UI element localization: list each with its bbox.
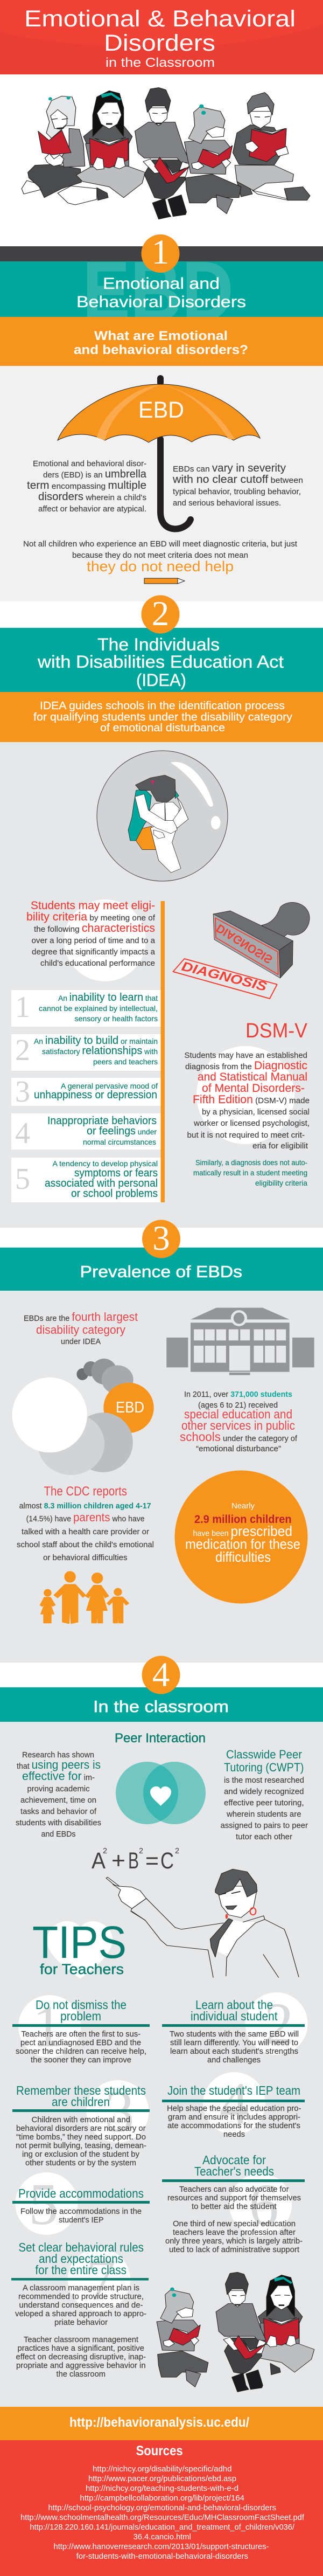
tip 3: behavioral disorders are not scary or: [16, 2124, 146, 2133]
tip 6: 6: [249, 2172, 279, 2238]
characteristic 3: unhappiness or depression: [34, 1089, 157, 1101]
text: classwide peer tutoring: wherein students are: [226, 1810, 301, 1819]
tip 4: gram and ensure it includes appropri-: [168, 2113, 300, 2122]
panel: IDEA guidance: IDEA guides schools in the identification process: [40, 700, 285, 712]
title: in the Classroom: [106, 56, 215, 70]
text: CDC report: [17, 1484, 154, 1562]
text: eligibility criteria: bility criteria by meeting one of: [26, 911, 156, 923]
text: eligibility criteria: child's educational performance: [40, 959, 155, 968]
text: 371,000 students: other services in public: [181, 1418, 295, 1432]
tip 7: Set clear behavioral rules: [18, 2240, 144, 2254]
tip 2: learn about each student's strengths: [170, 2047, 298, 2056]
tip 2: still learn differently. You will need to: [170, 2038, 298, 2047]
tip 5: Provide accommodations: [18, 2186, 144, 2200]
tip 3: “time bombs,” they need support. Do: [16, 2132, 146, 2142]
characteristic 4: or feelings under: [87, 1125, 157, 1137]
tip 1: the sooner they can improve: [31, 2055, 131, 2065]
tip 3: 3: [104, 2079, 135, 2144]
characteristic 1: 1: [15, 991, 30, 1024]
tip 3: ing or exclusion of the student by: [22, 2150, 139, 2159]
text: eligibility criteria: Students may meet eligi-: [31, 899, 155, 912]
panel: prevalence content: [0, 1291, 323, 1663]
characteristic 2: satisfactory relationships with: [42, 1045, 158, 1057]
panel: EBD umbrella explanation: [0, 366, 323, 601]
section 2 title: (IDEA): [136, 670, 186, 690]
text: CDC report: almost 8.3 million children aged 4-17: [19, 1501, 151, 1511]
panel: IDEA eligibility content: [0, 742, 323, 1228]
tip 7: effect on decreasing disruptive, inap-: [16, 2352, 146, 2362]
heading: DSM-V: DSM-V: [245, 1020, 308, 1042]
tip 4: ate accommodations for the student's: [167, 2121, 300, 2130]
chart: disability category bubbles: EBD: [116, 1399, 144, 1416]
tip 1: Do not dismiss the: [36, 1998, 127, 2012]
callout: 2.9 million children: 2.9 million children: [194, 1513, 292, 1526]
tip 2: individual student: [191, 2009, 278, 2023]
text: using peers: tasks and behavior of: [20, 1807, 97, 1816]
tip 2: Learn about the: [195, 1998, 273, 2012]
panel: website link: http://behavioranalysis.uc.edu/: [69, 2415, 249, 2430]
characteristic 1: cannot be explained by intellectual,: [39, 1004, 158, 1013]
section number 4: 4: [152, 1656, 170, 1694]
tip 6: Teachers can also advocate for: [179, 2185, 289, 2194]
tip 5: [12, 2171, 150, 2237]
text: DSM-V explanation: and Statistical Manual: [198, 1071, 307, 1083]
source list: http://nichcy.org/disability/specific/adhd: [93, 2464, 231, 2474]
panel: section 4 heading: [0, 1656, 323, 1722]
tip 4: needs: [223, 2130, 245, 2139]
panel: what are EBDs heading: and behavioral disorders?: [74, 343, 248, 357]
source list: http://campbellcollaboration.org/lib/project/164: [80, 2494, 244, 2503]
section 1 title: Behavioral Disorders: [76, 293, 246, 311]
tip 5: 5: [29, 2171, 58, 2237]
text: classwide peer tutoring: and widely recognized: [224, 1787, 304, 1796]
text: classwide peer tutoring: assigned to pairs to peer: [221, 1821, 308, 1830]
text: using peers: proving academic: [27, 1784, 90, 1793]
tip 3: Children with emotional and: [31, 2115, 130, 2124]
text: classwide peer tutoring: Tutoring (CWPT): [224, 1761, 304, 1774]
tip 6: Teacher's needs: [194, 2164, 274, 2178]
text: they do not need help: because they do not meet criteria does not mean: [72, 551, 248, 560]
text: they do not need help: they do not need help: [87, 558, 234, 574]
characteristic 4: normal circumstances: [83, 1138, 156, 1146]
source list: http://www.schoolmentalhealth.org/Resources/Educ/MHClassroomFactSheet.pdf: [20, 2513, 305, 2522]
tip 4: 4: [220, 2071, 249, 2136]
tip 5: Follow the accommodations in the: [20, 2207, 142, 2216]
tip 7: understand consequences and de-: [19, 2301, 143, 2310]
tip 7: propriate and aggressive behavior in: [16, 2361, 146, 2370]
icon: family: [40, 1571, 129, 1624]
characteristic 5: or school problems: [71, 1188, 158, 1200]
text: DSM-V explanation: diagnosis from the Diagnostic: [185, 1060, 307, 1072]
text: DSM-V explanation: Students may have an established: [184, 1051, 307, 1060]
title: Emotional & Behavioral: [24, 6, 296, 32]
characteristic 1: sensory or health factors: [74, 1014, 158, 1023]
tip 6: teachers leave the profession after: [173, 2228, 296, 2237]
tip 4: Join the student's IEP team: [167, 2083, 300, 2097]
section 3 title: Prevalence of EBDs: [80, 1262, 242, 1281]
text: using peers: that using peers is: [17, 1758, 101, 1771]
text: DSM-V explanation: [184, 1051, 310, 1151]
icon: pencil: [144, 578, 185, 584]
decorative circle behind eligibility text: [64, 899, 146, 981]
section 1 title: Emotional and: [103, 275, 220, 293]
panel: what are EBDs heading: [0, 317, 323, 366]
panel: classroom content: [0, 1722, 323, 2407]
tip 6: [162, 2153, 305, 2254]
section 1 title: [76, 275, 246, 311]
text: they do not need help: [23, 539, 298, 574]
text: fourth largest category: [24, 1310, 138, 1346]
title: [24, 6, 296, 70]
equation: A: [92, 1848, 106, 1874]
icon: umbrella: EBD: [138, 397, 184, 423]
source list: http://nichcy.org/teaching-students-with-e-d: [86, 2484, 238, 2493]
text: DSM-V explanation: by a physician, licensed social: [202, 1107, 310, 1117]
tip 1: problem: [60, 2009, 101, 2023]
text: DSM-V explanation: eria for eligibilit: [252, 1141, 308, 1151]
characteristic 2: 2: [15, 1034, 30, 1067]
text: umbrella term: term encompassing multiple: [27, 480, 146, 491]
callout: 2.9 million children: have been prescribed: [193, 1523, 292, 1539]
tip 1: 1: [32, 1993, 62, 2059]
illustration: five children reading: [22, 88, 310, 219]
text: CDC report: school staff about the child's emotional: [17, 1540, 154, 1549]
text: using peers: and EBDs: [41, 1830, 75, 1839]
text: umbrella term: [27, 459, 147, 514]
section number 1: 1: [152, 233, 169, 272]
text: umbrella term: Emotional and behavioral disor-: [33, 459, 146, 468]
callout: 2.9 million children: [174, 1470, 308, 1604]
text: DSM-V explanation: Fifth Edition (DSM-V) made: [193, 1093, 310, 1106]
tip 3: not permit bullying, teasing, demean-: [16, 2141, 146, 2150]
tip 1: [12, 1993, 150, 2065]
title: Disorders: [104, 30, 215, 56]
equation: 2: [175, 1846, 179, 1855]
panel: section 1 heading: [0, 234, 323, 317]
characteristic 5: 5: [15, 1162, 30, 1196]
text: using peers: students with disabilities: [16, 1818, 101, 1827]
section number 1: [141, 233, 180, 273]
characteristic 4: [11, 1113, 160, 1150]
heading: tips for teachers: TIPS: [32, 1917, 127, 1968]
characteristic 4: 4: [15, 1117, 30, 1150]
characteristic 5: [11, 1158, 160, 1202]
text: vary in severity: EBDs can vary in severity: [173, 462, 286, 474]
tip 6: uted to lack of administrative support: [169, 2245, 300, 2254]
characteristic 2: An inability to build or maintain: [34, 1035, 158, 1047]
section 2 title: The Individuals: [97, 635, 220, 654]
icon: diagnosis stamp: DIAGNOSIS: [214, 922, 275, 966]
callout: 2.9 million children: medication for these: [185, 1536, 300, 1552]
tip 3: [12, 2079, 150, 2168]
chart: disability category bubbles: [12, 1359, 154, 1475]
panel: header: [0, 0, 323, 74]
text: umbrella term: affect or behavior are atypical.: [38, 504, 146, 514]
illustration: girl in a bubble: [97, 751, 228, 881]
text: CDC report: or behavioral difficulties: [43, 1553, 127, 1562]
text: they do not need help: Not all children who experience an EBD will meet diagnostic criteria, but just: [23, 539, 298, 549]
tip 7: priate behavior: [54, 2318, 108, 2327]
icon: umbrella: [58, 375, 260, 529]
tip 1: sooner the children can receive help,: [16, 2047, 146, 2056]
text: eligibility criteria: degree that significantly impacts a: [32, 947, 156, 957]
text: diagnosis caveat: [193, 1158, 307, 1187]
panel: section 1 heading: EBD: [82, 244, 234, 337]
panel: IDEA guidance: of emotional disturbance: [100, 722, 225, 734]
tip 1: Teachers are often the first to sus-: [21, 2030, 141, 2039]
text: umbrella term: disorders wherein a child's: [38, 491, 146, 503]
tip 7: the classroom: [56, 2370, 106, 2379]
text: DSM-V explanation: of Mental Disorders-: [202, 1082, 305, 1095]
text: using peers: effective for im-: [22, 1769, 95, 1783]
equation: =: [145, 1848, 159, 1874]
tip 3: Remember these students: [16, 2083, 146, 2097]
tip 5: student's IEP: [59, 2215, 103, 2225]
heading: peer interaction: Peer Interaction: [115, 1731, 206, 1746]
text: classwide peer tutoring: Classwide Peer: [226, 1748, 302, 1761]
text: fourth largest category: disability category: [36, 1323, 125, 1337]
source list: for-students-with-emotional-behavioral-disorders: [76, 2552, 248, 2561]
callout: 2.9 million children: Nearly: [231, 1501, 255, 1511]
text: CDC report: The CDC reports: [44, 1484, 127, 1499]
tip 2: [162, 1991, 308, 2065]
equation: B: [128, 1848, 139, 1874]
tip 7: practices have a significant, positive: [17, 2344, 144, 2353]
text: 371,000 students: (ages 6 to 21) received: [198, 1401, 278, 1410]
equation: [92, 1846, 179, 1874]
tip 7: and expectations: [39, 2252, 123, 2266]
panel: section 3 heading: [0, 1219, 323, 1291]
tip 6: resources and support for themselves: [167, 2193, 301, 2203]
section number 2: [141, 594, 180, 634]
section number 3: [142, 1219, 180, 1258]
text: classwide peer tutoring: effective peer tutoring,: [224, 1798, 304, 1808]
tip 7: A classroom management plan is: [23, 2283, 139, 2293]
text: 371,000 students: In 2011, over 371,000 students: [184, 1390, 292, 1399]
characteristic 4: Inappropriate behaviors: [47, 1115, 157, 1127]
panel: section 2 heading: [0, 594, 323, 692]
characteristic 2: [11, 1034, 160, 1071]
text: vary in severity: and serious behavioral issues.: [173, 498, 281, 508]
tip 7: recommended to provide structure,: [18, 2292, 144, 2301]
tip 6: One third of new special education: [173, 2219, 296, 2228]
equation: +: [111, 1848, 125, 1874]
decorative circle behind DSM text: [196, 1046, 294, 1144]
illustration: three children reading: [157, 2272, 314, 2392]
text: fourth largest category: EBDs are the fourth largest: [24, 1310, 138, 1324]
tip 2: and challenges: [207, 2055, 261, 2065]
tip 7: 7: [86, 2247, 116, 2312]
text: diagnosis caveat: Similarly, a diagnosis does not auto-: [195, 1158, 307, 1167]
source list: http://www.pacer.org/publications/ebd.asp: [88, 2474, 236, 2483]
text: umbrella term: ders (EBD) is an umbrella: [43, 468, 147, 480]
icon: venn diagram with heart: [116, 1762, 206, 1824]
characteristic 3: A general pervasive mood of: [61, 1082, 158, 1090]
characteristic 1: An inability to learn that: [58, 992, 158, 1003]
source list: [20, 2464, 305, 2561]
tip 6: to better aid the student: [192, 2202, 277, 2211]
text: CDC report: (14.5%) have parents who have: [26, 1511, 145, 1524]
text: classwide peer tutoring: is the most researched: [224, 1776, 304, 1785]
text: diagnosis caveat: eligibility criteria: [255, 1179, 307, 1187]
text: vary in severity: typical behavior, troubling behavior,: [173, 487, 301, 496]
characteristic 5: associated with personal: [45, 1178, 158, 1189]
text: eligibility criteria: over a long period of time and to a: [31, 936, 156, 945]
tip 6: Advocate for: [202, 2153, 266, 2167]
text: 371,000 students: special education and: [184, 1407, 292, 1421]
tip 2: Two students with the same EBD will: [170, 2030, 299, 2039]
tip 7: for the entire class: [35, 2263, 127, 2277]
tip 2: 2: [264, 1991, 294, 2056]
text: CDC report: talked with a health care provider or: [22, 1527, 149, 1536]
callout: 2.9 million children: difficulties: [215, 1549, 271, 1565]
panel: website link: [0, 2407, 323, 2440]
tip 7: Teacher classroom management: [24, 2335, 139, 2344]
source list: http://128.220.160.141/journals/education_and_treatment_of_children/v036/: [30, 2523, 295, 2532]
text: 371,000 students: [180, 1390, 298, 1453]
text: classwide peer tutoring: tutor each other: [236, 1832, 292, 1841]
section 4 title: In the classroom: [93, 1697, 229, 1716]
heading: sources: Sources: [136, 2443, 183, 2459]
panel: IDEA guidance: [0, 692, 323, 742]
equation: 2: [139, 1846, 143, 1855]
panel: what are EBDs heading: What are Emotional: [94, 329, 228, 343]
source list: http://www.hanoverresearch.com/2013/01/support-structures-: [54, 2542, 269, 2551]
equation: C: [160, 1848, 174, 1874]
text: eligibility criteria: the following characteristics: [34, 922, 155, 934]
characteristic 5: symptoms or fears: [74, 1167, 158, 1179]
icon: diagnosis stamp: DIAGNOSIS: [180, 959, 268, 994]
section 2 title: with Disabilities Education Act: [37, 652, 284, 671]
tip 4: [162, 2071, 305, 2139]
text: vary in severity: [172, 462, 303, 508]
panel: sources: [0, 2440, 323, 2576]
tip 4: Help shape the special education pro-: [167, 2104, 301, 2113]
tip 1: pect an undiagnosed EBD and the: [20, 2038, 141, 2047]
text: DSM-V explanation: but it is not required to meet crit-: [187, 1131, 305, 1140]
characteristic 2: peers and teachers: [93, 1057, 158, 1066]
text: vary in severity: with no clear cutoff between: [172, 474, 303, 486]
source list: http://school-psychology.org/emotional-and-behavioral-disorders: [48, 2503, 276, 2512]
icon: school building: [166, 1308, 314, 1375]
text: 371,000 students: “emotional disturbance”: [196, 1444, 281, 1453]
text: diagnosis caveat: matically result in a student meeting: [193, 1168, 307, 1177]
text: fourth largest category: under IDEA: [61, 1337, 101, 1346]
section number 3: 3: [152, 1219, 170, 1258]
heading: tips for teachers: for Teachers: [40, 1961, 124, 1977]
tip 7: veloped a shared approach to appro-: [15, 2309, 146, 2318]
equation: 2: [103, 1846, 107, 1855]
section number 4: [142, 1656, 180, 1694]
illustration: teacher pointing: [106, 1869, 299, 1977]
section number 2: 2: [152, 594, 169, 633]
characteristic 3: 3: [15, 1075, 30, 1109]
panel: IDEA guidance: for qualifying students under the disability category: [33, 711, 292, 723]
text: using peers: achievement, time on: [20, 1796, 96, 1805]
tip 3: are children: [52, 2095, 110, 2109]
tip 6: only three years, which is largely attrib-: [165, 2236, 303, 2246]
section 2 title: [37, 635, 284, 690]
characteristic 3: [11, 1075, 160, 1109]
source list: 36.4.cancio.html: [134, 2532, 191, 2542]
icon: diagnosis stamp: [173, 902, 310, 999]
tip 7: [11, 2240, 149, 2379]
text: using peers: [16, 1750, 101, 1839]
text: using peers: Research has shown: [22, 1750, 94, 1760]
text: DSM-V explanation: worker or licensed psychologist,: [193, 1119, 310, 1128]
text: eligibility criteria: [26, 899, 156, 968]
divider bar: orange vertical: [160, 901, 165, 1202]
text: classwide peer tutoring: [221, 1748, 308, 1841]
tip 3: other students or by the system: [25, 2158, 136, 2168]
characteristic 5: A tendency to develop physical: [53, 1159, 158, 1168]
characteristic 1: [11, 990, 160, 1027]
text: 371,000 students: schools under the category of: [180, 1430, 298, 1444]
